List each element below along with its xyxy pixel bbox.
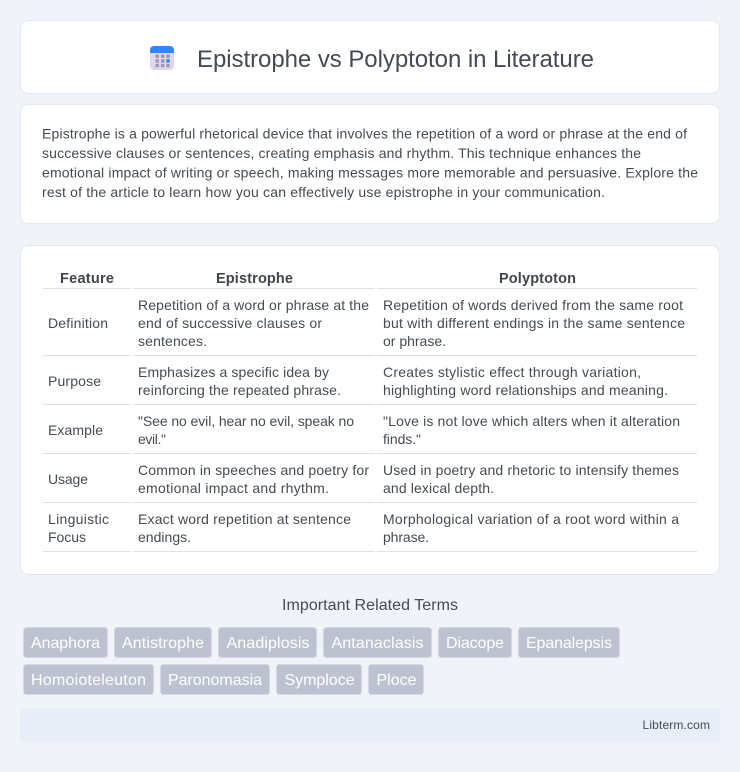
row: linguistic focus: Exact word repetition at sentence: [138, 511, 351, 527]
related term tags: Antanaclasis: [332, 635, 424, 652]
row: purpose: Creates stylistic effect through variation,: [383, 364, 641, 380]
row: definition: sentences.: [138, 333, 207, 349]
row: purpose: [48, 364, 668, 398]
row: linguistic focus: [48, 511, 679, 545]
related term tags: Paronomasia: [168, 672, 262, 689]
row: usage: Used in poetry and rhetoric to intensify themes: [383, 462, 679, 478]
row: linguistic focus: Morphological variation of a root word within a: [383, 511, 679, 527]
related term tags: Diacope: [446, 635, 504, 652]
related term tags: Antistrophe: [122, 635, 204, 652]
panel: header: [20, 20, 720, 94]
row: definition: Repetition of words derived from the same root: [383, 297, 683, 313]
row: linguistic focus: Focus: [48, 529, 86, 545]
footer: [20, 708, 720, 742]
intro text: emotional impact of writing or speech, making messages more memorable and persuasive. Explore the: [42, 164, 698, 180]
table header row: Feature: [60, 271, 114, 287]
row: example: "Love is not love which alters when it alteration: [383, 413, 680, 429]
row: definition: Definition: [48, 315, 108, 331]
intro text: successive clauses or sentences, creating emphasis and rhythm. This technique enhances the: [42, 145, 641, 161]
row: usage: Usage: [48, 471, 88, 487]
title: Epistrophe vs Polyptoton in Literature: [197, 46, 594, 73]
related term tags: Homoioteleuton: [31, 672, 146, 689]
related term tags: [24, 628, 620, 694]
footer credit: Libterm.com: [642, 718, 710, 732]
intro text: Epistrophe is a powerful rhetorical device that involves the repetition of a word or phrase at the end of: [42, 126, 687, 142]
heading: important related terms: Important Related Terms: [282, 597, 458, 614]
row: purpose: highlighting word relationships and meaning.: [383, 382, 668, 398]
row: example: finds.": [383, 431, 421, 447]
related term tags: Epanalepsis: [526, 635, 612, 652]
row: usage: emotional impact and rhythm.: [138, 480, 329, 496]
row: usage: [48, 462, 679, 496]
related term tags: Symploce: [284, 672, 355, 689]
row: definition: or phrase.: [383, 333, 446, 349]
row: purpose: Purpose: [48, 373, 101, 389]
row: usage: and lexical depth.: [383, 480, 494, 496]
row: example: [48, 413, 680, 447]
row dividers: [43, 288, 697, 552]
row: definition: end of successive clauses or: [138, 315, 322, 331]
row: example: evil.": [138, 431, 166, 447]
row: definition: Repetition of a word or phrase at the: [138, 297, 369, 313]
table header row: Epistrophe: [216, 271, 293, 287]
panel: comparison table: [20, 246, 720, 574]
row: definition: [48, 297, 685, 349]
related term tags: Anadiplosis: [226, 635, 310, 652]
row: example: Example: [48, 422, 103, 438]
row: linguistic focus: endings.: [138, 529, 191, 545]
row: example: "See no evil, hear no evil, speak no: [138, 413, 354, 429]
row: usage: Common in speeches and poetry for: [138, 462, 369, 478]
icon: calendar: [150, 46, 174, 70]
row: purpose: reinforcing the repeated phrase.: [138, 382, 341, 398]
intro text: [42, 126, 698, 200]
related term tags: Anaphora: [31, 635, 100, 652]
intro text: rest of the article to learn how you can effectively use epistrophe in your communication.: [42, 184, 605, 200]
row: purpose: Emphasizes a specific idea by: [138, 364, 329, 380]
row: definition: but with different endings in the same sentence: [383, 315, 685, 331]
related term tags: Ploce: [376, 672, 417, 689]
table header row: [60, 271, 576, 287]
row: linguistic focus: Linguistic: [48, 511, 109, 527]
table header row: Polyptoton: [499, 271, 576, 287]
panel: introduction: [20, 104, 720, 224]
row: linguistic focus: phrase.: [383, 529, 429, 545]
